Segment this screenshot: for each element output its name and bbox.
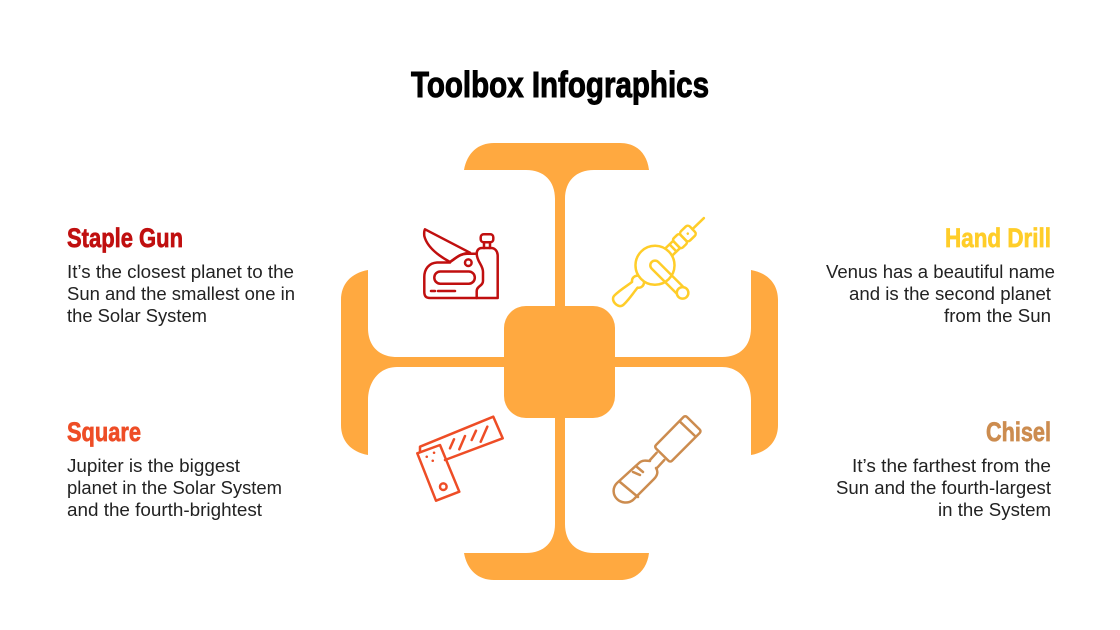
text block: Chisel <box>836 417 1051 520</box>
text block: Hand Drill: Hand Drill <box>945 223 1051 253</box>
text block: Square: planet in the Solar System <box>67 478 282 498</box>
text block: Chisel: in the System <box>938 500 1051 520</box>
text block: Chisel: Chisel <box>986 417 1051 447</box>
text block: Staple Gun: the Solar System <box>67 306 207 326</box>
text block: Chisel: It’s the farthest from the <box>852 456 1051 476</box>
text block: Staple Gun: It’s the closest planet to the <box>67 262 294 282</box>
title: Toolbox Infographics <box>411 64 709 105</box>
text block: Staple Gun: Staple Gun <box>67 223 183 253</box>
text block: Staple Gun: Sun and the smallest one in <box>67 284 295 304</box>
icon: hand drill <box>602 204 735 336</box>
central toolbox cross shape <box>341 143 778 580</box>
icon: carpenter square <box>417 417 503 501</box>
text block: Hand Drill: Venus has a beautiful name <box>826 262 1055 282</box>
text block: Chisel: Sun and the fourth-largest <box>836 478 1051 498</box>
text block: Square <box>67 417 282 520</box>
text block: Square: Square <box>67 417 141 447</box>
text block: Staple Gun <box>67 223 295 326</box>
text block: Hand Drill: from the Sun <box>944 306 1051 326</box>
text block: Hand Drill: and is the second planet <box>849 284 1051 304</box>
text block: Square: Jupiter is the biggest <box>67 456 240 476</box>
text block: Square: and the fourth-brightest <box>67 500 262 520</box>
icon: staple gun <box>424 229 498 298</box>
icon: chisel <box>614 416 700 503</box>
text block: Hand Drill <box>826 223 1055 326</box>
